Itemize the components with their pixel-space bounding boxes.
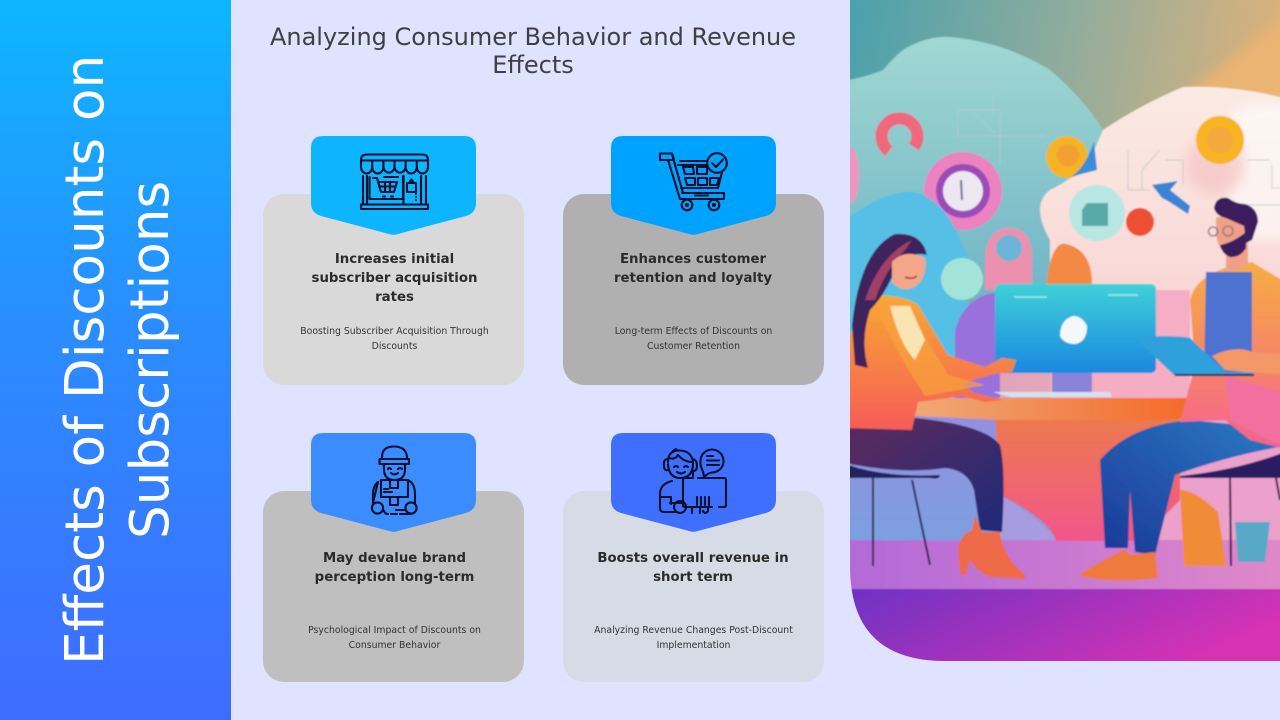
person: woman [840,234,1025,579]
left-edge pink disc [850,146,860,204]
computer monitor [993,284,1156,397]
badge with icon: shopping cart [611,136,776,235]
cyan blob [840,192,972,400]
woman torso and arm [845,295,1016,430]
desk pedestal [995,415,1180,541]
card 2 description: Long-term Effects of Discounts on Customer Retention [615,326,772,352]
man neck and face [1216,216,1248,272]
red ring icon [881,118,917,151]
lilac wall [955,292,1000,400]
woman shoes [958,515,1025,579]
man glasses [1209,226,1233,236]
illustration: two people at a desk [850,0,1280,661]
card 4: short-term revenue [563,491,824,682]
faint wall lines [912,85,1280,205]
teal badge [1069,185,1125,241]
woman chair [850,464,940,567]
red ball [1126,208,1154,236]
man torso [1180,262,1280,450]
man hand [1212,349,1280,375]
card 4 heading: Boosts overall revenue in short term [597,551,789,585]
man hair and beard [1214,198,1258,257]
card 1 heading: Increases initial subscriber acquisition rates [312,252,477,305]
gold coin 2 [1185,116,1245,195]
man legs [1100,420,1280,555]
card 3: brand perception [263,491,524,682]
clock icon [924,152,1002,230]
man laptop [1134,336,1254,376]
card 1 description: Boosting Subscriber Acquisition Through Discounts [300,326,489,352]
gold coin 1 [1046,136,1097,178]
panel: gradient sidebar [0,0,231,720]
background gradient [850,0,1280,398]
magnifier shape [985,228,1032,290]
heading: Analyzing Consumer Behavior and Revenue Effects [270,23,796,79]
man shoes [1078,549,1158,580]
stool and bucket [1180,490,1270,566]
card 4 description: Analyzing Revenue Changes Post-Discount Implementation [594,625,793,651]
peach hill [1190,24,1280,96]
badge with icon: storefront [311,136,476,235]
card 2 heading: Enhances customer retention and loyalty [614,252,772,286]
sidebar title [54,55,181,665]
floor [840,540,1280,590]
man chair [1180,450,1280,566]
card 1: subscriber acquisition [263,194,524,385]
woman legs [840,418,1004,532]
desk top [915,398,1190,420]
orange blob [1046,244,1092,284]
card 3 heading: May devalue brand perception long-term [315,551,474,585]
badge with icon: support agent [611,433,776,532]
lower wall [850,415,1056,541]
teal blob [840,37,1105,300]
badge with icon: delivery worker [311,433,476,532]
cream wall [1040,87,1280,420]
woman hair [852,234,927,368]
card 3 description: Psychological Impact of Discounts on Consumer Behavior [308,625,481,651]
sidebar title: Effects of Discounts on [54,55,116,665]
person: man [1078,198,1280,580]
card 2: customer retention [563,194,824,385]
blue arrow [1152,181,1190,214]
woman face [892,254,925,289]
sidebar title: Subscriptions [119,181,181,539]
